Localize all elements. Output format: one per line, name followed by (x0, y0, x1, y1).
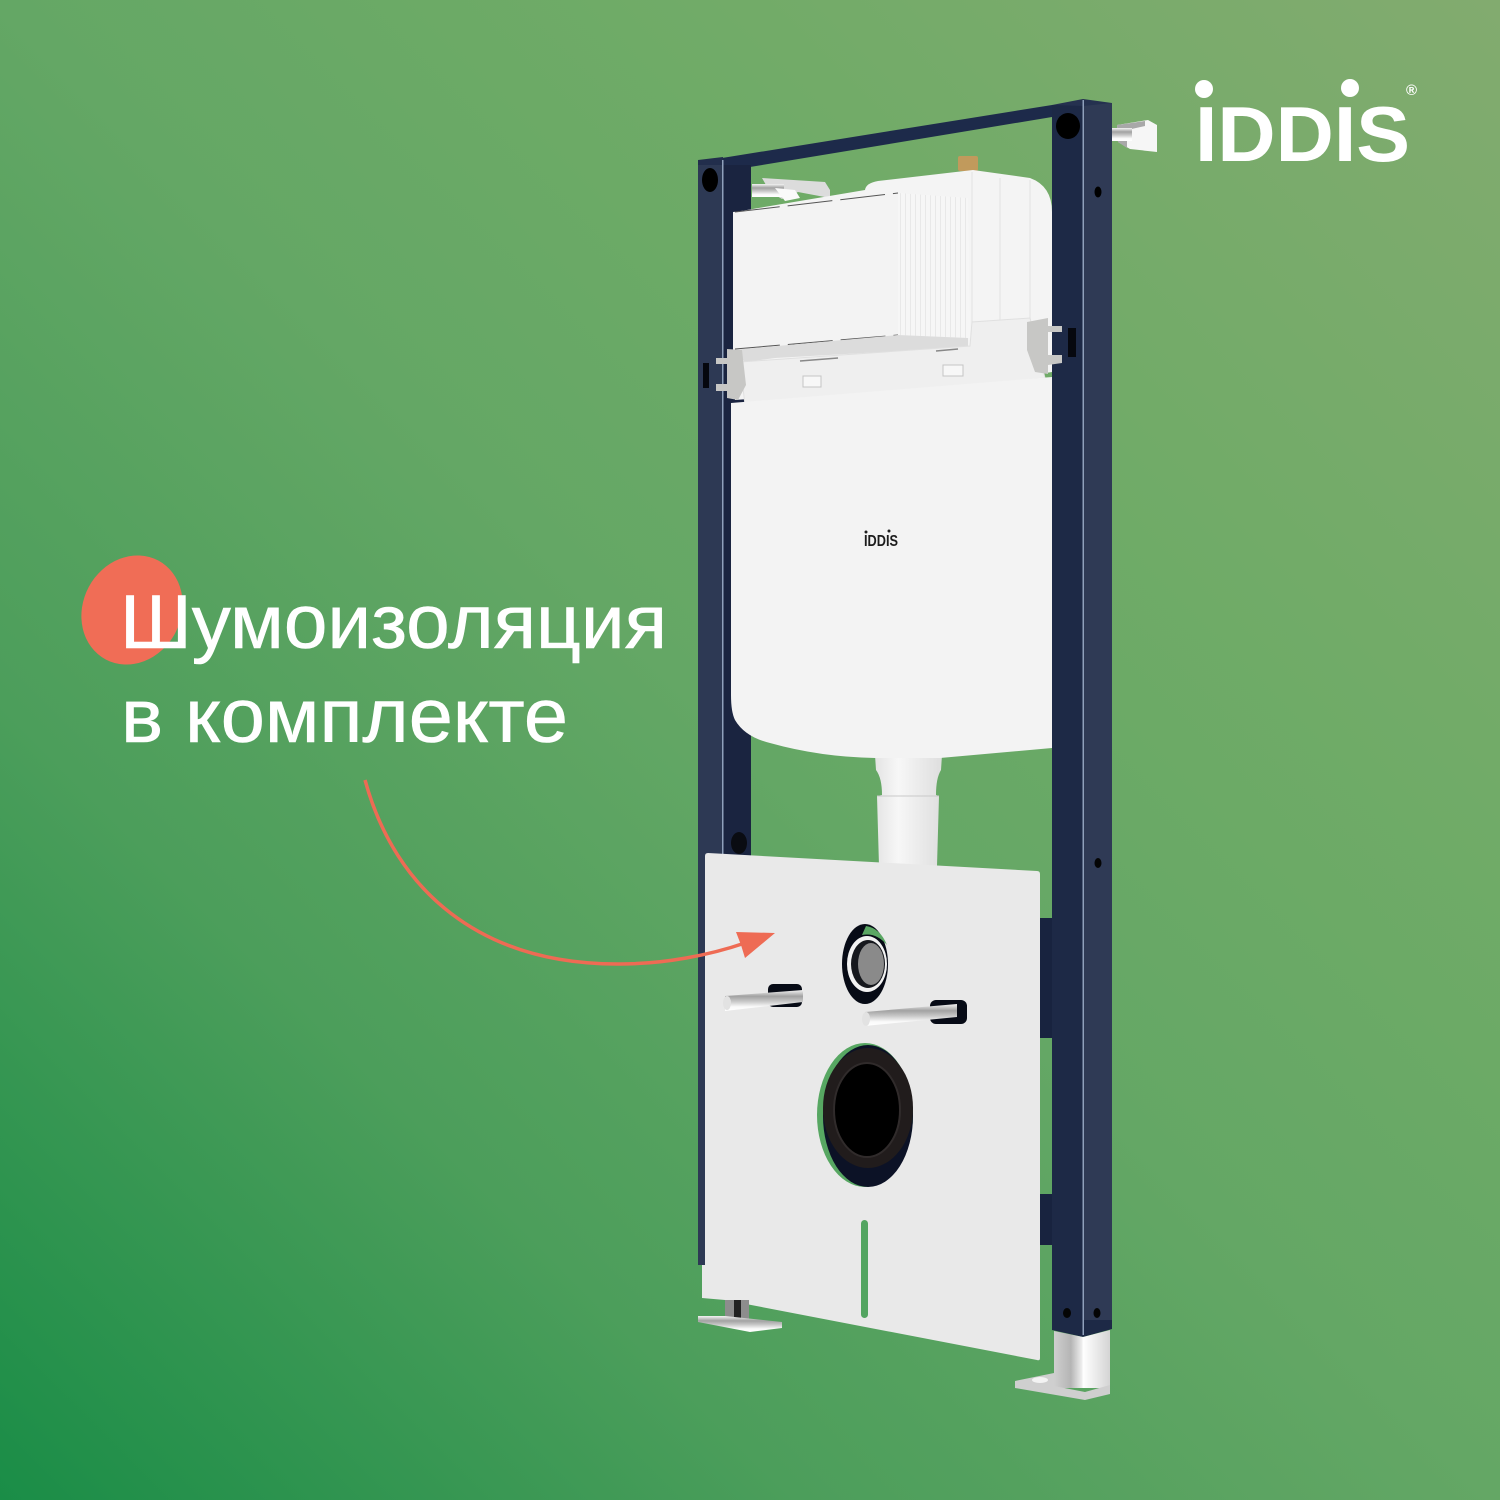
frame top crossbar (722, 105, 1052, 170)
grey clip: right (1027, 318, 1062, 374)
frame right post (1052, 99, 1112, 1337)
sound insulation panel (702, 853, 1040, 1360)
coral accent blob (62, 538, 202, 682)
cross supports behind panel (1040, 918, 1052, 1245)
housing vertical seams (972, 172, 1030, 322)
bracket notches (803, 365, 963, 387)
vent slits (800, 349, 958, 361)
left foot (698, 1300, 782, 1332)
wall bracket: top right (1112, 120, 1157, 152)
heading (120, 580, 667, 759)
underside vent strip (733, 335, 968, 362)
wall bracket: top left (752, 178, 830, 201)
stud right (862, 1000, 967, 1026)
heading: Шумоизоляция (120, 580, 667, 665)
arrow to panel (365, 780, 775, 964)
flush pipe (875, 755, 942, 866)
stud left (723, 984, 803, 1011)
small brand mark on cistern: IDDIS (864, 533, 898, 550)
heading: в комплекте (121, 674, 568, 759)
cistern back housing (735, 170, 1052, 400)
bracket plate (740, 318, 1045, 405)
frame left post (698, 157, 751, 1265)
small brand mark on cistern (864, 530, 898, 550)
cistern lower body (731, 377, 1052, 758)
ribbed insulation side (898, 193, 970, 338)
logo: IDDIS: IDDIS (1195, 90, 1410, 178)
logo: IDDIS: ® (1406, 82, 1417, 99)
upper hole with flush pipe (842, 924, 888, 1004)
product: installation frame (698, 99, 1112, 1337)
panel sheet (702, 853, 1040, 1360)
grey clip: left (716, 349, 746, 400)
cistern front insulation block (733, 193, 898, 350)
brass water connector (958, 156, 978, 171)
drain slot (861, 1220, 868, 1318)
large outlet hole with rubber seal (817, 1043, 913, 1187)
right foot (1015, 1330, 1110, 1400)
